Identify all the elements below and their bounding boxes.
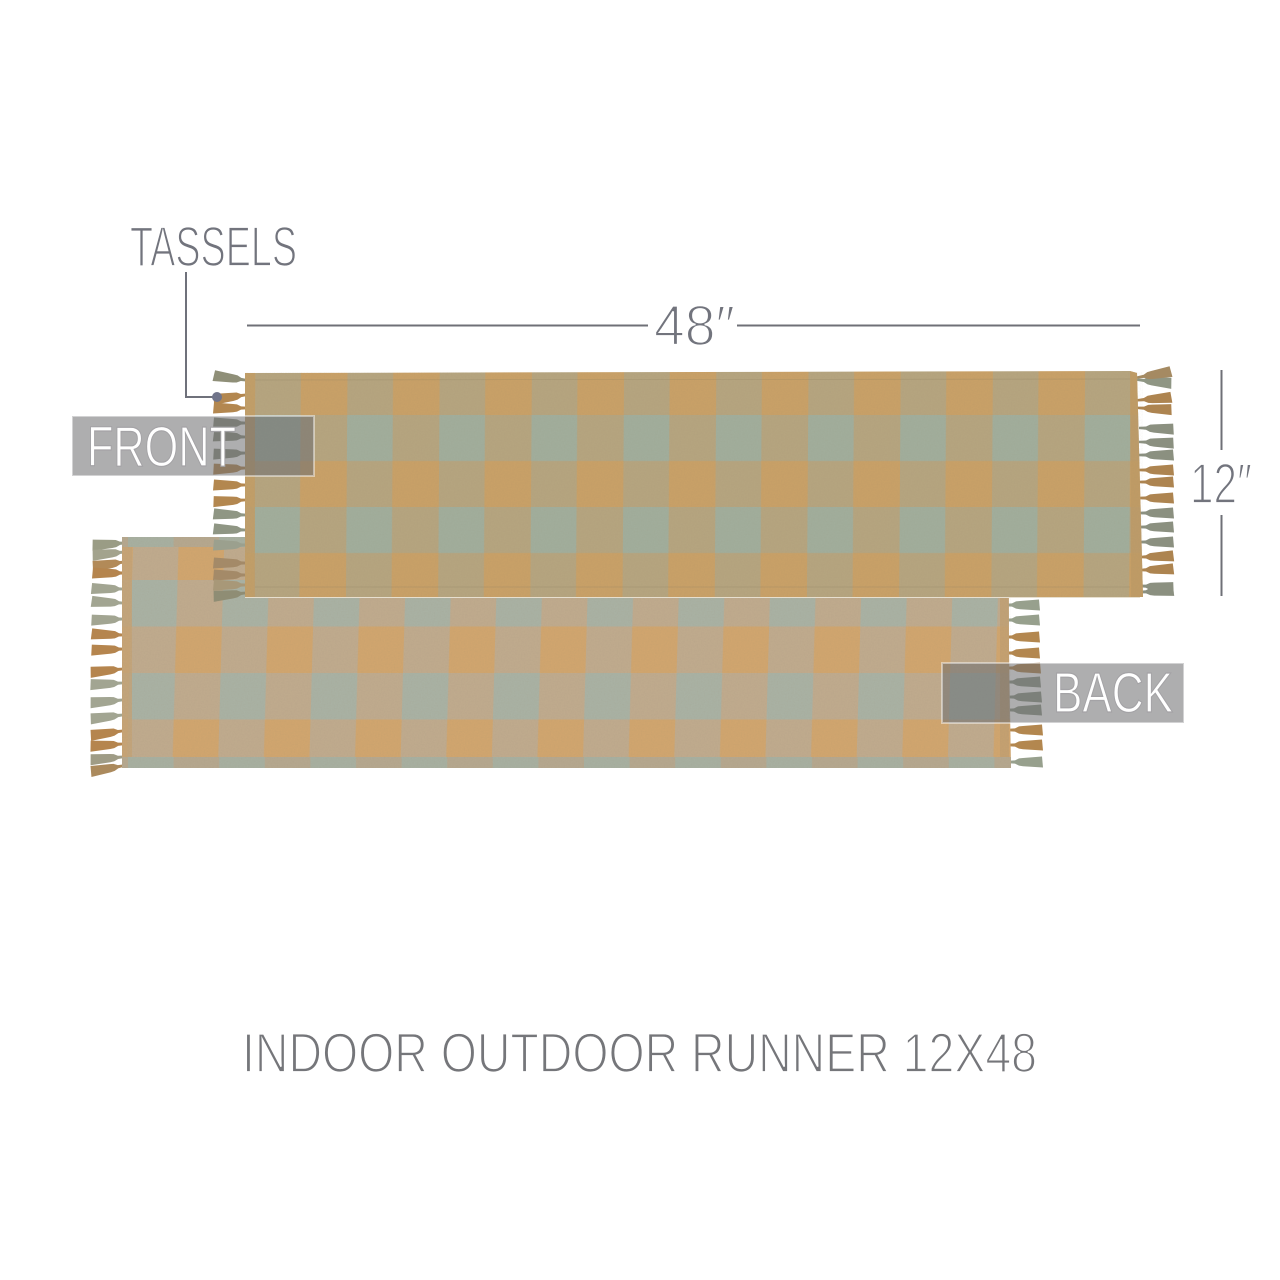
product title: INDOOR OUTDOOR RUNNER 12X48 — [242, 1021, 1037, 1084]
tassels callout — [130, 215, 297, 402]
back runner left tassels — [90, 537, 128, 777]
back runner cloth — [122, 537, 1011, 768]
tassels heading: TASSELS — [130, 215, 297, 279]
front runner left tassels — [213, 370, 249, 602]
back runner — [90, 537, 1043, 777]
front runner — [213, 366, 1174, 602]
back label — [942, 661, 1184, 725]
height dimension 12 inches: 12″ — [1190, 452, 1252, 516]
front label: FRONT — [87, 415, 236, 479]
back label: BACK — [1053, 661, 1173, 725]
back runner right tassels — [1005, 600, 1043, 768]
tassels leader dot — [212, 392, 222, 402]
width dimension 48 inches: 48″ — [654, 294, 735, 358]
tassels leader line — [186, 272, 216, 397]
front runner right tassels — [1136, 366, 1174, 598]
front runner cloth — [245, 371, 1143, 598]
